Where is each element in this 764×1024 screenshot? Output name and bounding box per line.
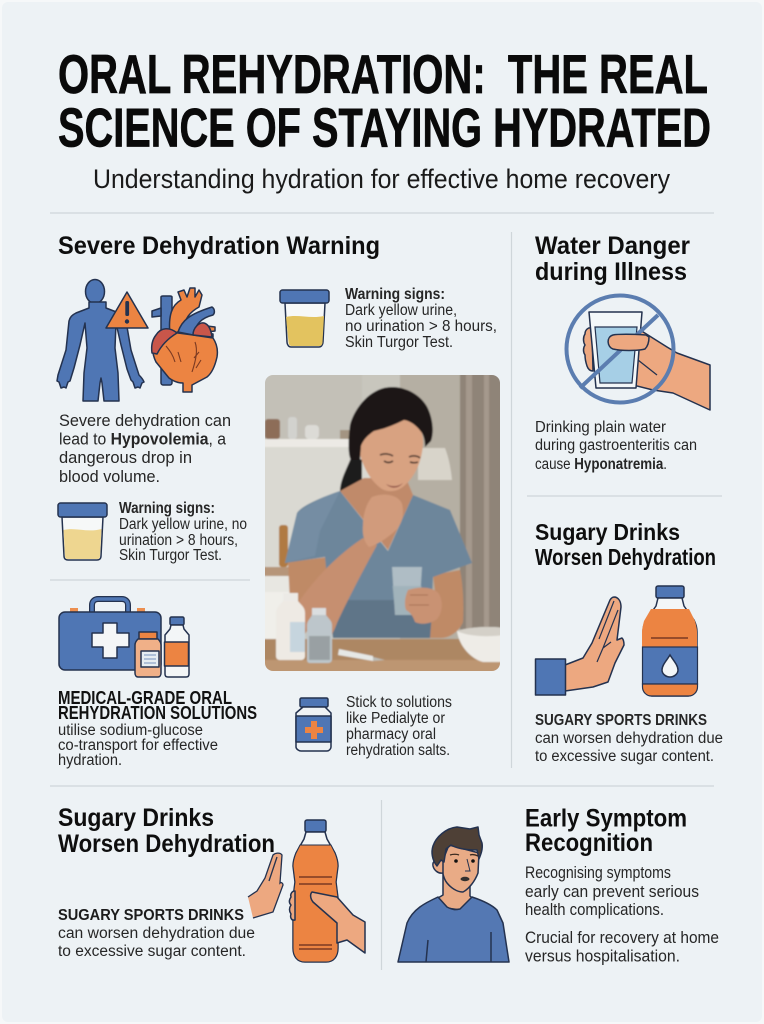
bowl	[456, 630, 500, 663]
icon: medicine bottle	[296, 698, 331, 751]
ponytail	[340, 455, 362, 493]
shirt	[287, 491, 472, 601]
icon: sports bottle	[642, 586, 698, 696]
text: medical-grade solutions: co-transport for effective	[58, 737, 218, 754]
icon: hand with glass, prohibited	[566, 296, 710, 410]
icon: worried man	[398, 827, 509, 962]
upper arm left	[288, 557, 328, 638]
heading: sugary drinks bottom: Worsen Dehydration	[58, 830, 275, 858]
icon: stop hand	[536, 597, 624, 695]
text: sugary sports drinks bottom: to excessive sugar content.	[58, 943, 246, 960]
text: hypovolemia explanation: blood volume.	[59, 467, 160, 486]
icon: urine cup dark	[280, 290, 329, 347]
text: stick to solutions: rehydration salts.	[346, 742, 450, 759]
text: medical-grade solutions: hydration.	[58, 752, 122, 769]
text: warning signs top	[345, 286, 497, 351]
text: stick to solutions: Stick to solutions	[346, 694, 452, 711]
text: medical-grade solutions: utilise sodium-glucose	[58, 722, 203, 739]
icon: human body	[57, 280, 144, 401]
icon: stop hand small	[248, 853, 283, 918]
icon: warning triangle	[106, 292, 148, 328]
panel: severe dehydration warning	[57, 232, 380, 564]
text: warning signs	[119, 500, 247, 564]
text: sugary sports drinks bottom	[58, 907, 255, 960]
text: early recognition: early can prevent serious	[525, 882, 699, 901]
text: sugary sports drinks	[535, 712, 723, 765]
text: warning signs: Warning signs:	[119, 500, 215, 517]
heading: water danger during illness: during Illness	[535, 258, 687, 286]
text: sugary sports drinks: SUGARY SPORTS DRINKS	[535, 712, 707, 729]
panel: centre column	[262, 286, 504, 759]
text: stick to solutions: like Pedialyte or	[346, 710, 445, 727]
text: hyponatremia: cause Hyponatremia.	[535, 456, 667, 473]
text: sugary sports drinks bottom: SUGARY SPORTS DRINKS	[58, 907, 244, 924]
hair	[349, 387, 433, 460]
heading: sugary drinks: Sugary Drinks	[535, 519, 680, 545]
text: warning signs: Dark yellow urine, no	[119, 516, 247, 533]
holding hand	[405, 588, 442, 624]
text: stick to solutions	[346, 694, 452, 759]
subtitle: Understanding hydration for effective home recovery	[93, 164, 671, 194]
heading: sugary drinks	[535, 519, 716, 570]
large bottle	[289, 592, 300, 602]
text: medical-grade solutions: MEDICAL-GRADE ORAL	[58, 688, 232, 708]
heading: water danger during illness	[535, 232, 690, 286]
heading: sugary drinks bottom	[58, 804, 275, 858]
text: warning signs top: Warning signs:	[345, 286, 445, 303]
text: sugary sports drinks: to excessive sugar content.	[535, 748, 714, 765]
heading: early symptom recognition: Early Symptom	[525, 804, 687, 832]
icon: heart	[152, 288, 217, 392]
text: sugary sports drinks bottom: can worsen dehydration due	[58, 925, 255, 942]
hand at chin	[363, 495, 403, 547]
text: warning signs: Skin Turgor Test.	[119, 547, 222, 564]
text: stick to solutions: pharmacy oral	[346, 726, 436, 743]
heading: sugary drinks bottom: Sugary Drinks	[58, 804, 214, 832]
heading: early symptom recognition	[525, 804, 687, 857]
text: hypovolemia explanation: dangerous drop in	[59, 448, 192, 467]
text: warning signs top: Dark yellow urine,	[345, 302, 457, 319]
text: medical-grade solutions	[58, 688, 257, 769]
text: warning signs top: Skin Turgor Test.	[345, 334, 453, 351]
right arm back	[430, 570, 464, 638]
title	[58, 43, 711, 158]
panel: sugary drinks bottom	[58, 804, 365, 962]
table	[265, 638, 478, 661]
text: warning signs top: no urination > 8 hours,	[345, 318, 497, 335]
heading: water danger during illness: Water Danger	[535, 232, 690, 260]
panel: sugary drinks right	[535, 519, 723, 765]
glass	[392, 567, 422, 615]
text: hyponatremia: Drinking plain water	[535, 419, 666, 436]
text: hyponatremia	[535, 419, 697, 473]
text: medical-grade solutions: REHYDRATION SOLUTIONS	[58, 703, 257, 723]
panel: early symptom recognition	[398, 804, 719, 966]
heading: early symptom recognition: Recognition	[525, 829, 653, 857]
text: hyponatremia: during gastroenteritis can	[535, 437, 697, 454]
icon: orange bottle with hand	[290, 820, 365, 962]
panel: medical-grade solutions	[58, 599, 257, 769]
text: early recognition: Recognising symptoms	[525, 863, 671, 882]
text: warning signs: urination > 8 hours,	[119, 532, 238, 549]
text: recovery at home	[525, 928, 719, 966]
head	[358, 414, 423, 491]
icon: first aid kit	[59, 599, 189, 677]
syringe	[338, 649, 373, 661]
text: recovery at home: versus hospitalisation.	[525, 946, 680, 966]
heading: sugary drinks: Worsen Dehydration	[535, 544, 716, 570]
text: early recognition: health complications.	[525, 900, 664, 919]
heading: severe dehydration warning: Severe Dehydration Warning	[58, 232, 380, 260]
forearm raised	[299, 538, 377, 638]
text: hypovolemia explanation	[59, 411, 231, 486]
text: hypovolemia explanation: lead to Hypovolemia, a	[59, 430, 226, 448]
photo: woman holding a glass of water	[262, 372, 504, 674]
neck and chest	[340, 478, 413, 550]
text: hypovolemia explanation: Severe dehydration can	[59, 411, 231, 430]
small bottle	[312, 608, 326, 615]
panel: water danger	[535, 232, 710, 473]
text: early recognition	[525, 863, 699, 919]
text: recovery at home: Crucial for recovery at home	[525, 928, 719, 947]
text: sugary sports drinks: can worsen dehydration due	[535, 730, 723, 747]
icon: urine cup	[58, 503, 107, 560]
